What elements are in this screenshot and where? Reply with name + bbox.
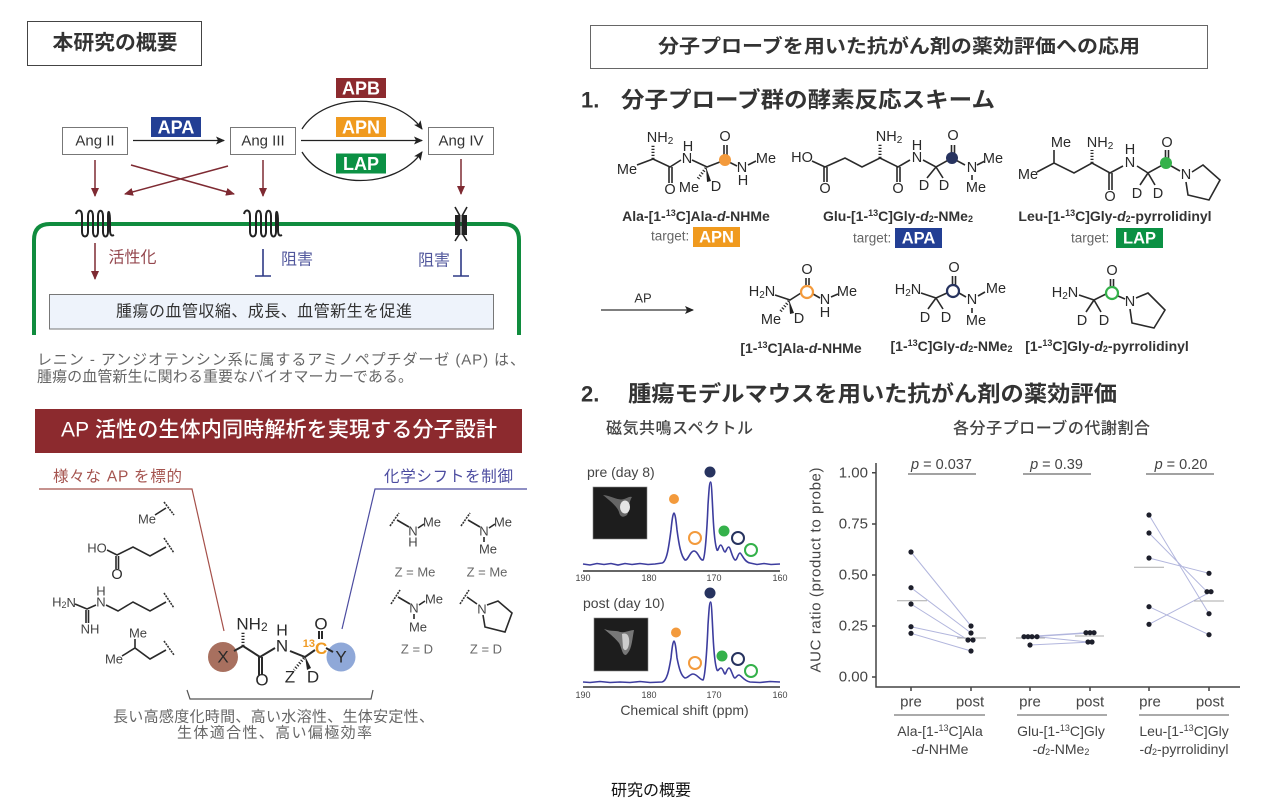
cell membrane [34,224,519,335]
target tag: APA: APA [902,230,935,248]
Ang IV box: Ang IV [438,132,484,150]
reaction arrow: AP [601,290,693,310]
scaffold atom labels: Z [285,668,295,686]
probe: Ala: D [711,179,721,195]
group label: Leu line 2: -pyrrolidinyl [1157,741,1229,757]
Y group: pyrrolidinyl: Z = D [470,642,502,656]
Y group: NHMe: Z = Me [395,564,435,580]
product: Ala: N [820,292,830,308]
probe: Glu: D [939,178,949,194]
circle X: X [217,648,229,666]
hashed and wedged bonds [243,631,311,670]
heading: targeting AP: 様々な AP を標的 [53,468,182,486]
section heading 1: 分子プローブ群の酵素反応スキーム [621,88,995,112]
Y group: NMe2: Z = Me [467,564,507,580]
peak markers: pre [669,466,757,556]
group label: Glu line 2: -d [1033,741,1045,757]
probe: Glu: H [912,138,922,154]
probe: Ala: O [719,129,731,145]
product: Gly NMe2: 2 [968,344,973,354]
probe: Leu: Me [1018,167,1038,183]
circle Y [326,642,356,672]
side chain: arginine: N [67,594,76,610]
product: Gly pyrrolidinyl: O [1106,263,1118,279]
heading: study overview: 本研究の概要 [52,32,178,54]
x axis labels [900,694,1225,710]
x axis label: chemical shift: Chemical shift (ppm) [620,702,749,718]
scaffold atom labels: N [276,636,288,656]
product: Gly NMe2: N [967,292,977,308]
product: Gly pyrrolidinyl: N [1125,294,1135,310]
probe: Ala: 2 [668,136,674,146]
section heading 1: 1. [581,88,599,112]
outcome box [50,294,494,329]
bracket [187,690,373,699]
probe: Leu: d [1117,208,1126,224]
description text: レニン - アンジオテンシン系に属するアミノペプチダーゼ (AP) は、 [37,352,525,368]
scaffold atom labels: 2 [261,620,268,634]
product: Gly NMe2: H [895,282,905,298]
NMR spectrum: pre: 170 [706,573,722,583]
chart title: metabolic ratio: 各分子プローブの代謝割合 [953,418,1150,438]
Y group: NMe2 [461,513,512,580]
side chain: arginine [52,584,174,636]
panel: drug evaluation [575,26,1240,757]
enzyme tag: APN: APN [342,118,380,138]
enzyme tag: APA: APA [158,118,194,138]
product: Gly NMe2 [891,260,1012,354]
group label: Glu line 2: -NMe [1050,741,1085,757]
Y group: NHMe: N [408,524,418,538]
probe scaffold [208,614,356,690]
side chain: methyl [138,502,174,526]
main heading: 分子プローブを用いた抗がん剤の薬効評価への応用 [658,34,1140,58]
inhibition mark: Ang III [255,249,271,276]
Y group: NMe2 deuterated: Me [409,620,427,634]
x axis labels: pre [900,694,922,710]
NMR spectrum: pre: pre (day 8) [587,464,655,480]
scaffold atom labels: H [276,622,288,640]
product: Gly NMe2: C]Gly- [918,338,960,354]
probe: Leu: Leu-[1- [1018,208,1065,224]
probe: Glu: Me [966,180,986,196]
product: Ala [740,262,862,356]
probe: Ala: H [738,173,748,189]
y axis title: AUC ratio (product to probe) [808,468,824,672]
probe: Ala: NH [647,130,668,146]
product: Gly pyrrolidinyl [1025,263,1189,354]
probe: Leu: H [1125,142,1135,158]
p value: group 3: p = 0.20 [1154,457,1207,473]
inhibition mark: Ang IV [453,249,469,276]
labeled carbon: APA [946,152,958,164]
probe: Ala: C]Ala- [676,208,717,224]
receptor: Ang II [76,210,114,236]
probe: Glu: 13 [868,208,878,218]
y axis labels: 0.25 [839,618,868,634]
Y group: NMe2 deuterated [391,590,443,656]
x axis labels: pre [1019,694,1041,710]
probe: Glu: Me [983,151,1003,167]
probe: Glu: d [920,208,929,224]
Y group: pyrrolidinyl [460,590,512,656]
callout line: Y [342,489,527,629]
label: activation: 活性化 [108,248,157,266]
side chain: arginine: N [96,594,106,610]
heading: study overview [28,22,202,66]
callout line: X [39,489,224,631]
side chain: leucine [105,626,174,666]
probe: Glu: C]Gly- [878,208,920,224]
product: Gly NMe2: d [960,338,969,354]
x axis labels: post [1196,694,1225,710]
scaffold atom labels: D [307,668,319,686]
Y group: NHMe: H [408,534,418,550]
receptor binding arrows [95,159,461,196]
Y group: pyrrolidinyl: N [477,602,487,616]
NMR spectrum: pre: 190 [575,573,591,583]
tumor image: post [594,618,648,671]
probe: Glu: -NMe [934,208,968,224]
side chain: arginine: H [52,594,61,610]
probe: Glu: HO [791,150,813,166]
probe: Leu: O [1104,189,1116,205]
circle X [208,642,238,672]
y axis labels: 0.50 [839,566,868,584]
side chain: methyl: Me [138,512,156,526]
y axis labels: 1.00 [839,464,868,482]
probe: Glu: 2 [968,214,973,224]
probe: Leu: 13 [1065,208,1075,218]
side chain: arginine: H [96,584,106,598]
reaction arrow: AP: AP [634,290,652,306]
probe: Glu: D [919,178,929,194]
panel: molecular design [35,409,527,742]
banner heading: AP 活性の生体内同時解析を実現する分子設計 [61,418,497,442]
receptor: Ang III [244,210,282,236]
label: inhibition right: 阻害 [418,252,450,270]
Y group: NMe2 deuterated: Me [425,592,443,606]
probe: Leu [1018,135,1220,248]
product: Gly pyrrolidinyl: d [1094,338,1103,354]
tumor image: pre [593,487,647,539]
x axis labels: post [1076,694,1105,710]
group label: Glu line 2: 2 [1084,747,1089,757]
side chain: glutamate [87,538,174,583]
NMR spectrum: post: 180 [641,690,657,700]
caption: 研究の概要 [611,782,691,800]
probe: Leu: C]Gly- [1075,208,1117,224]
product: Ala: N [765,284,775,300]
product: Gly NMe2: Me [986,281,1006,297]
peak markers: post [671,588,757,677]
probe: Glu: 2 [897,134,903,146]
panel: study overview [28,22,525,386]
product: Ala: Me [837,284,857,300]
labeled carbon: APN [719,154,731,166]
probe: Ala: Me [679,180,699,196]
side chain: arginine: 2 [61,600,67,610]
group label: Ala: Ala-[1- [897,723,938,739]
NMR spectrum: post: 190 [575,690,591,700]
product: Gly NMe2: N [911,282,921,298]
probe: Leu: -pyrrolidinyl [1131,208,1212,224]
data: Leu probe [1134,512,1224,637]
group separators [894,714,1229,716]
scaffold atom labels [236,614,328,690]
Ang III box: Ang III [241,132,285,150]
data: Ala probe [897,549,986,654]
scaffold bonds [234,631,333,675]
activation arrow [94,243,96,279]
group label: Leu: Leu-[1- [1139,723,1184,739]
labeled carbon: LAP [1160,157,1172,169]
description text: 腫瘍の血管新生に関わる重要なバイオマーカーである。 [37,368,413,386]
probe: Leu: 2 [1126,214,1131,224]
side chain: glutamate: O [111,567,123,583]
side chain: leucine: Me [129,626,147,640]
circle Y: Y [335,648,347,666]
probe: Glu: target: [853,230,891,246]
product: Gly NMe2: D [920,310,930,326]
data: Glu probe [1016,630,1104,648]
target tag: APN: APN [699,228,734,246]
section heading 2: 腫瘍モデルマウスを用いた抗がん剤の薬効評価 [628,382,1117,406]
probe: Glu: 2 [929,214,934,224]
product: Ala: d-NHMe [809,340,862,356]
probe: Ala: Ala-[1- [622,208,666,224]
NMR spectrum: post: 170 [706,690,722,700]
product: Gly NMe2: [1- [891,338,908,354]
properties text: 生体適合性、高い偏極効率 [177,724,372,742]
NMR spectrum: pre: 180 [641,573,657,583]
probe: Leu: N [1125,155,1135,171]
probe: Ala: N [682,151,692,167]
heading: chemical shift control: 化学シフトを制御 [384,468,513,486]
product: Gly pyrrolidinyl: D [1077,313,1087,329]
probe: Ala: 13 [666,208,676,218]
product: Gly NMe2: -NMe [973,338,1008,354]
enzyme tag: APB: APB [342,78,380,98]
group label: Ala: 13 [938,723,949,733]
Y group: NMe2: Me [494,514,512,530]
side chain: arginine: NH [81,622,99,636]
Y group: NMe2 deuterated: N [409,600,419,616]
product: Gly NMe2: 13 [908,338,918,348]
probe: Leu: 2 [1108,140,1114,152]
probe: Leu: D [1153,186,1163,202]
x axis labels: pre [1139,694,1161,710]
13C label: C [315,638,327,658]
main heading [590,26,1208,68]
product: Ala: C]Ala- [768,340,809,356]
Y group: NMe2 deuterated: Z = D [401,642,433,656]
product: Gly pyrrolidinyl: C]Gly- [1052,338,1095,354]
product: Ala: H [820,305,830,321]
group label: Ala: C]Ala [949,723,983,739]
product: Gly pyrrolidinyl: [1- [1025,338,1042,354]
product: Gly pyrrolidinyl: H [1052,285,1062,301]
product: Ala: 13 [757,340,768,350]
receptor: Ang IV [455,207,467,241]
product: Gly NMe2: O [948,260,960,276]
outcome box: 腫瘍の血管収縮、成長、血管新生を促進 [116,302,412,320]
chart title: NMR spectra: 磁気共鳴スペクトル [606,420,753,438]
NMR spectrum: post: 160 [772,690,788,700]
product: Gly pyrrolidinyl: 2 [1062,290,1068,302]
probe: Glu: O [892,181,904,197]
section heading 2: 2. [581,382,599,406]
probe: Leu: Me [1051,135,1071,151]
product: Gly pyrrolidinyl: -pyrrolidinyl [1108,338,1189,354]
probe: Leu: NH [1087,135,1108,151]
product: Gly pyrrolidinyl: N [1068,285,1078,301]
group label: Glu: C]Gly [1070,723,1105,739]
NMR spectrum: post: post (day 10) [583,595,665,611]
Ang II box: Ang II [75,132,115,150]
x axis labels: post [956,694,985,710]
y axis labels: 0.75 [839,516,868,532]
product: Ala: D [794,311,804,327]
probe: Ala: d-NHMe [717,208,770,224]
probe: Glu: N [967,160,977,176]
target tag: LAP [1116,228,1163,248]
product: Ala: Me [761,312,781,328]
probe: Ala: Me [756,151,776,167]
probe: Ala: target: [651,228,689,244]
p value: group 1: p = 0.037 [910,457,972,473]
group label: Leu: C]Gly [1194,723,1229,739]
y axis labels [839,464,868,686]
scaffold atom labels: O [255,670,269,690]
probe: Ala: O [664,182,676,198]
Ang II box [62,128,128,154]
properties text [113,708,434,742]
axes [872,463,1240,691]
product: Gly pyrrolidinyl: D [1099,313,1109,329]
probe: Leu: target: [1071,230,1109,246]
product: Gly NMe2: Me [966,313,986,329]
probe: Leu: N [1181,167,1191,183]
target tag: APA [895,228,942,248]
Ang III box [230,128,296,154]
side chain: glutamate: HO [87,540,107,556]
NMR spectrum: pre [575,464,788,583]
group label: Glu: 13 [1060,723,1070,733]
label: inhibition center: 阻害 [281,250,313,268]
NMR spectrum: pre: 160 [772,573,788,583]
product: Gly pyrrolidinyl: 13 [1042,338,1052,348]
paired dot plot [808,457,1240,757]
probe: Glu: NH [876,129,897,145]
product: Gly NMe2: 2 [1007,344,1012,354]
enzyme tag: LAP: LAP [343,154,379,174]
product: Ala: H [749,284,759,300]
side chain: leucine: Me [105,652,123,666]
probe: Glu [791,128,1003,248]
Y group: NMe2: N [479,524,489,538]
probe: Glu: Glu-[1- [823,208,868,224]
Y group: NHMe [390,513,441,580]
probe: Glu: N [912,150,922,166]
product: Gly NMe2: 2 [905,288,911,298]
product: Ala: [1- [740,340,757,356]
product: Ala: 2 [759,290,765,300]
properties text: 長い高感度化時間、高い水溶性、生体安定性、 [113,708,434,726]
scaffold atom labels: O [314,614,328,634]
y axis labels: 0.00 [839,668,868,686]
probe: Ala: Me [617,162,637,178]
scaffold atom labels: NH [236,614,261,634]
Y group: NHMe: Me [423,514,441,530]
product: Ala: O [801,262,813,278]
target tag: APN [693,227,740,247]
group label: Glu: Glu-[1- [1017,723,1060,739]
group label: Leu line 2: -d [1139,741,1152,757]
Y group: NMe2: Me [479,542,497,556]
NMR spectrum: post [575,588,788,700]
target tag: LAP: LAP [1123,230,1156,248]
probe: Leu: O [1161,135,1173,151]
probe: Ala: N [737,160,747,176]
group label: Leu: 13 [1184,723,1194,733]
probe: Ala [617,129,776,247]
description text [37,352,525,386]
probe: Glu: O [819,181,831,197]
probe: Leu: D [1132,186,1142,202]
13C label: 13 [303,638,315,650]
product: Gly NMe2: D [941,310,951,326]
product: Gly pyrrolidinyl: 2 [1103,344,1108,354]
probe: Ala: H [683,139,693,155]
banner heading [35,409,522,453]
group label: Leu line 2: 2 [1152,747,1157,757]
probe: Glu: O [947,128,959,144]
conversion arrows [133,101,422,180]
Ang IV box [428,128,494,154]
p value: group 2: p = 0.39 [1029,457,1083,473]
group label: Ala line 2: -d-NHMe [912,741,969,757]
group label: Glu line 2: 2 [1045,747,1050,757]
